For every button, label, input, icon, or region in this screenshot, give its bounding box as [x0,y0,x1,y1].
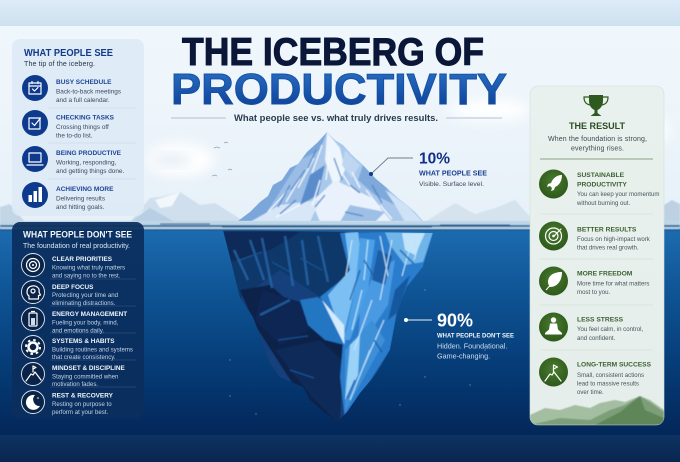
callout: 10 percent: Visible. Surface level. [419,181,484,188]
item: systems and habits [22,336,133,361]
background: ocean [0,228,680,462]
item: checking tasks: CHECKING TASKS [56,114,115,122]
item: long-term success [539,358,652,396]
callout: 90 percent: WHAT PEOPLE DON'T SEE [437,332,514,340]
item: long-term success: over time. [577,389,604,396]
item: less stress [539,312,643,342]
item: energy management [22,308,127,334]
item: better results: BETTER RESULTS [577,226,637,234]
item: deep focus: eliminating distractions. [52,300,116,307]
panel: what people don't see: The foundation of real productivity. [23,243,130,250]
item: sustainable productivity: SUSTAINABLE [577,172,625,179]
item: achieving more: Delivering results [56,196,105,202]
callout: 90 percent: Game-changing. [437,352,490,360]
item: sustainable productivity: You can keep your momentum [577,191,659,198]
icon: trophy [584,95,608,116]
background: distant mountains [0,192,680,222]
item: less stress: You feel calm, in control, [577,326,643,333]
item: busy schedule [22,75,121,104]
callout: 90 percent [404,310,514,360]
mountain range illustration [530,396,664,425]
panel: the result [530,86,664,425]
item: long-term success: Small, consistent actions [577,372,644,379]
callout: 10 percent: 10% [419,150,450,168]
panel: the result: everything rises. [571,146,624,152]
panel: what people don't see [12,222,144,418]
item: systems and habits: that create consistency. [52,354,116,361]
item: achieving more: ACHIEVING MORE [56,186,114,193]
birds [212,142,232,176]
water surface line [0,221,680,231]
item: sustainable productivity [539,170,659,207]
panel: the result: When the foundation is strong, [548,136,647,143]
item: systems and habits: SYSTEMS & HABITS [52,338,115,345]
item: sustainable productivity: without burning out. [576,200,630,207]
item: clear priorities: CLEAR PRIORITIES [52,256,113,263]
title: PRODUCTIVITY [171,65,507,114]
item: clear priorities: Knowing what truly matters [52,264,125,272]
title [171,31,507,114]
item: mindset and discipline: MINDSET & DISCIPLINE [52,365,126,372]
iceberg: underwater mass [220,228,436,425]
callout: 90 percent: 90% [437,310,473,330]
heading: what people see: WHAT PEOPLE SEE [24,48,113,59]
heading: what people don't see: WHAT PEOPLE DON'T SEE [23,230,132,240]
item: better results: that drives real growth. [577,244,639,252]
item: rest and recovery: Resting on purpose to [52,401,112,408]
item: busy schedule: Back-to-back meetings [56,88,121,96]
item: deep focus [22,280,118,307]
subtitle: What people see vs. what truly drives results. [234,113,438,123]
item: checking tasks: the to-do list. [56,132,93,140]
callout: 10 percent [369,150,487,188]
item: being productive: Working, responding, [56,160,116,166]
item: long-term success: lead to massive results [577,380,639,388]
item: clear priorities: and saying no to the rest. [52,272,121,280]
item: checking tasks: Crossing things off [56,124,109,131]
item: more freedom: MORE FREEDOM [577,270,633,278]
item: energy management: ENERGY MANAGEMENT [52,311,127,318]
item: better results: Focus on high-impact work [577,236,651,243]
item: systems and habits: Building routines and systems [52,346,133,354]
panel: what people see: The tip of the iceberg. [24,60,95,68]
item: rest and recovery: REST & RECOVERY [52,392,114,400]
item: mindset and discipline: motivation fades. [52,381,98,388]
item: deep focus: Protecting your time and [52,292,118,299]
item: long-term success: LONG-TERM SUCCESS [577,362,652,368]
item: deep focus: DEEP FOCUS [52,284,94,291]
item: being productive: and getting things done. [56,168,124,175]
item: mindset and discipline: Staying committed when [52,374,118,380]
item: being productive: BEING PRODUCTIVE [56,150,122,157]
item: more freedom [539,266,649,296]
item: sustainable productivity: PRODUCTIVITY [577,182,627,188]
item: busy schedule: and a full calendar. [56,97,110,104]
item: mindset and discipline [22,362,126,388]
callout: 90 percent: Hidden. Foundational. [437,342,507,350]
item: achieving more: and hitting goals. [56,204,105,211]
heading: the result: THE RESULT [569,121,625,131]
item: energy management: and emotions daily. [52,328,104,334]
item: more freedom: most to you. [577,289,610,296]
callout: 10 percent: WHAT PEOPLE SEE [419,170,487,178]
item: rest and recovery [22,390,114,416]
item: checking tasks [22,110,115,140]
item: rest and recovery: perform at your best. [52,409,109,416]
iceberg: visible tip [235,130,425,222]
item: better results [539,222,651,252]
item: less stress: LESS STRESS [577,316,624,324]
title: THE ICEBERG OF [182,31,484,74]
item: busy schedule: BUSY SCHEDULE [56,79,112,86]
item: less stress: and confident. [577,335,616,342]
panel: what people see [12,39,144,216]
item: achieving more [22,182,114,211]
item: clear priorities [22,254,125,280]
background: sky [0,0,680,230]
item: more freedom: More time for what matters [577,280,649,288]
item: energy management: Fueling your body, mind, [52,320,119,326]
item: being productive [22,146,124,175]
